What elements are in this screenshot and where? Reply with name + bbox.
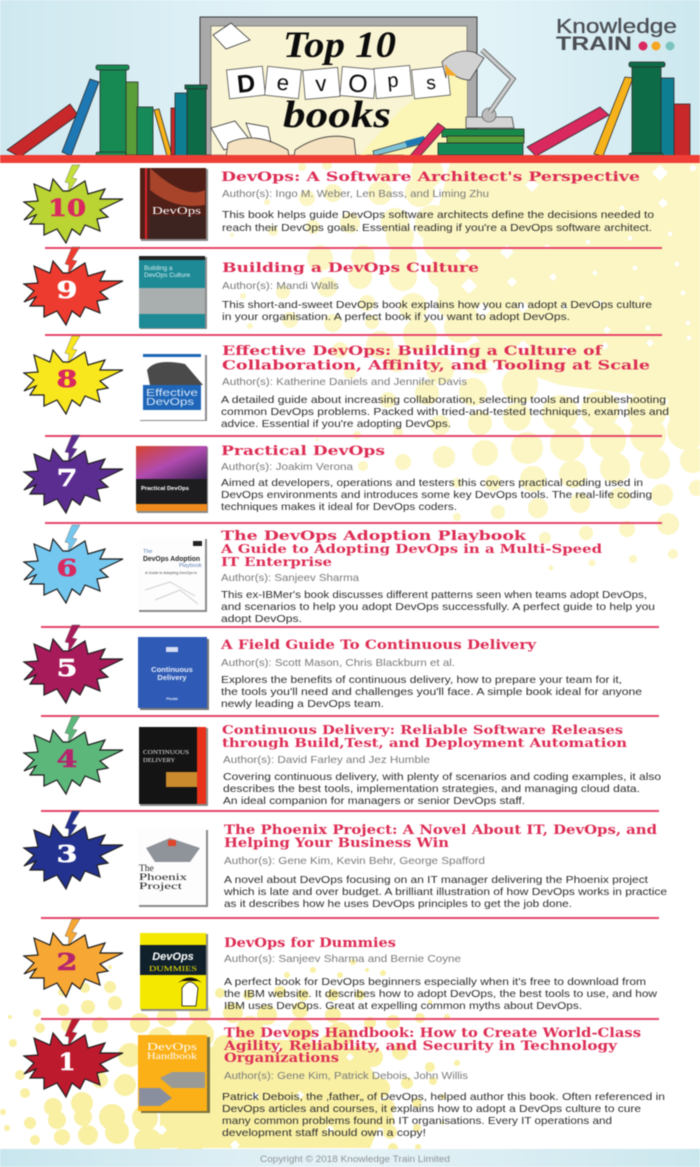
- heading: DevOps letter tiles: e: [276, 69, 290, 96]
- title: [222, 722, 627, 750]
- logo: Knowledge Train: TRAIN: [556, 34, 632, 55]
- sticky notes: [211, 23, 271, 150]
- book cover: [140, 933, 208, 1011]
- badge: number 4: 4: [56, 746, 78, 773]
- badge: number 5: [24, 625, 123, 703]
- desk lamp: [442, 50, 514, 128]
- heading: DevOps letter tiles: D: [236, 69, 257, 99]
- authors: Author(s): Gene Kim, Kevin Behr, George Spafford: [224, 855, 485, 867]
- description: DevOps environments and introduces some key DevOps tools. The real-life coding: [221, 489, 652, 501]
- book cover: The: [143, 549, 152, 555]
- book cover: [138, 538, 207, 612]
- description: A perfect book for DevOps beginners especially when it's free to download from: [224, 976, 646, 988]
- badge: number 8: [24, 336, 123, 414]
- shelf: [0, 155, 700, 163]
- description: [221, 394, 669, 430]
- description: Explores the benefits of continuous delivery, how to prepare your team for it,: [221, 674, 622, 686]
- book cover: Phoenix: [139, 873, 187, 883]
- panel: book 10: [24, 165, 654, 243]
- description: [223, 771, 661, 807]
- authors: Author(s): Scott Mason, Chris Blackburn et al.: [221, 657, 455, 669]
- description: describes the best tools, implementation strategies, and managing cloud data.: [223, 783, 640, 795]
- book cover: Practical DevOps: [141, 486, 189, 492]
- authors: Author(s): Ingo M. Weber, Len Bass, and Liming Zhu: [222, 188, 489, 200]
- book cover: CONTINUOUS: [143, 749, 189, 756]
- description: common DevOps problems. Packed with tried-and-tested techniques, examples and: [221, 406, 669, 418]
- title: IT Enterprise: [221, 554, 332, 569]
- book cover: Playbook: [179, 563, 202, 569]
- title: Building a DevOps Culture: [222, 261, 479, 276]
- description: advice. Essential if you're adopting DevOps.: [221, 418, 451, 430]
- description: IBM uses DevOps. Great at expelling common myths about DevOps.: [224, 1000, 582, 1012]
- badge: number 10: [24, 165, 123, 243]
- description: the tools you'll need and challenges you'll face. A simple book ideal for anyone: [221, 686, 642, 698]
- book cover: [138, 1035, 210, 1113]
- heading: DevOps letter tiles: [227, 65, 450, 100]
- book cover: [139, 256, 207, 329]
- badge: number 3: [24, 811, 123, 889]
- book cover: DevOps: [152, 951, 194, 963]
- description: [223, 874, 667, 910]
- description: and scenarios to help you adopt DevOps successfully. A perfect guide to help you: [221, 601, 655, 613]
- book cover: DELIVERY: [143, 757, 175, 764]
- book cover: Building a: [144, 265, 173, 272]
- book cover: [138, 637, 209, 710]
- description: [222, 1091, 665, 1139]
- panel: book 7: [24, 435, 652, 513]
- badge: number 9: 9: [56, 277, 78, 304]
- book cover: DevOps Adoption: [143, 556, 200, 563]
- open book: [225, 136, 356, 160]
- badge: number 5: 5: [56, 655, 78, 682]
- title: A Field Guide To Continuous Delivery: [220, 638, 537, 653]
- description: An ideal companion for managers or senior DevOps staff.: [223, 795, 525, 807]
- book cover: [138, 829, 208, 907]
- title: The DevOps Adoption Playbook: [221, 529, 527, 544]
- authors: Author(s): David Farley and Jez Humble: [223, 754, 430, 766]
- description: which is late and over budget. A brilliant illustration of how DevOps works in practice: [223, 886, 667, 898]
- badge: number 7: [24, 435, 123, 513]
- badge: number 8: 8: [56, 366, 78, 393]
- badge: number 1: [24, 1019, 123, 1097]
- badge: number 6: [24, 525, 123, 603]
- right book stack: [527, 62, 690, 157]
- title: [222, 344, 650, 374]
- title: [223, 1026, 641, 1066]
- badge: number 7: 7: [56, 465, 78, 492]
- panel: book 5: [24, 625, 642, 710]
- book cover: DUMMIES: [149, 964, 197, 973]
- title: [220, 529, 602, 569]
- description: in your organisation. A perfect book if you want to adopt DevOps.: [222, 311, 570, 323]
- authors: Author(s): Mandi Walls: [222, 280, 339, 292]
- book cover: [139, 727, 208, 806]
- centre book stack: [438, 129, 524, 155]
- description: as it describes how he uses DevOps principles to get the job done.: [224, 898, 572, 910]
- description: A detailed guide about increasing collaboration, selecting tools and troubleshooting: [221, 394, 666, 406]
- authors: Author(s): Sanjeev Sharma: [221, 572, 359, 584]
- book cover: DevOps Culture: [144, 272, 191, 279]
- description: [221, 477, 652, 513]
- logo: Knowledge Train: [556, 16, 677, 55]
- title: Practical DevOps: [221, 444, 385, 459]
- title: Agility, Reliability, and Security in Technology: [223, 1039, 618, 1054]
- description: development staff should own a copy!: [222, 1127, 426, 1139]
- title: through Build,Test, and Deployment Automation: [222, 735, 627, 750]
- badge: number 6: 6: [56, 555, 78, 582]
- panel: book 1: [24, 1019, 665, 1139]
- panel: book 2: [24, 919, 657, 1012]
- book cover: [140, 168, 208, 241]
- book cover: Handbook: [147, 1051, 198, 1061]
- description: many common problems found in IT organisations. Every IT operations and: [222, 1115, 612, 1127]
- description: A novel about DevOps focusing on an IT manager delivering the Phoenix project: [224, 874, 648, 886]
- title: DevOps: A Software Architect's Perspective: [221, 170, 640, 185]
- description: the IBM website. It describes how to adopt DevOps, the best tools to use, and how: [224, 988, 657, 1000]
- badge: number 1: 1: [58, 1049, 76, 1076]
- title: The Devops Handbook: How to Create World-Class: [224, 1026, 641, 1041]
- footer band: [0, 1149, 700, 1167]
- book cover: Effective: [146, 388, 199, 399]
- panel: book 8: [24, 336, 669, 430]
- book cover: A Guide to Adopting DevOps in: [145, 571, 197, 575]
- board frame: [200, 17, 477, 155]
- description: DevOps articles and courses, it explains how to adopt a DevOps culture to cure: [222, 1103, 641, 1115]
- title: Collaboration, Affinity, and Tooling at Scale: [222, 358, 650, 374]
- heading: Top 10: Top 10: [283, 25, 396, 66]
- badge: number 3: 3: [56, 841, 78, 868]
- title: Effective DevOps: Building a Culture of: [222, 344, 604, 359]
- heading: DevOps letter tiles: p: [386, 70, 399, 92]
- book cover: DevOps: [152, 205, 201, 217]
- book cover: [136, 446, 208, 513]
- title: A Guide to Adopting DevOps in a Multi-Speed: [220, 541, 602, 556]
- description: Covering continuous delivery, with plenty of scenarios and coding examples, it also: [223, 771, 661, 783]
- description: [221, 589, 655, 625]
- background halftone: bottom white diamonds: [110, 1044, 354, 1150]
- panel: book 6: [24, 525, 655, 625]
- description: [222, 299, 652, 323]
- badge: number 2: 2: [56, 949, 78, 976]
- title: Continuous Delivery: Reliable Software Releases: [222, 722, 623, 737]
- title: The Phoenix Project: A Novel About IT, DevOps, and: [224, 823, 657, 838]
- book cover: Delivery: [157, 673, 187, 682]
- title: [224, 823, 657, 851]
- description: This book helps guide DevOps software architects define the decisions needed to: [222, 209, 654, 221]
- title: Organizations: [224, 1051, 339, 1066]
- book cover: Pivotal: [166, 697, 178, 701]
- description: Aimed at developers, operations and testers this covers practical coding used in: [221, 477, 643, 489]
- description: reach their DevOps goals. Essential reading if you're a DevOps software architect.: [222, 222, 652, 234]
- left book stack: [7, 65, 207, 158]
- panel: book 3: [24, 811, 667, 910]
- description: [224, 976, 657, 1012]
- authors: Author(s): Sanjeev Sharma and Bernie Coyne: [224, 953, 461, 965]
- background halftone: top right: [230, 156, 700, 570]
- heading: DevOps letter tiles: O: [347, 69, 369, 99]
- book cover: Continuous: [151, 665, 193, 674]
- pens and small book: [365, 123, 445, 163]
- sky background: [0, 0, 700, 156]
- description: [221, 674, 642, 710]
- background halftone: white diamonds: [455, 164, 697, 370]
- description: [222, 209, 654, 234]
- title: DevOps for Dummies: [224, 936, 396, 951]
- description: This ex-IBMer's book discusses different patterns seen when teams adopt DevOps,: [221, 589, 647, 601]
- title: Helping Your Business Win: [224, 836, 450, 851]
- heading: DevOps letter tiles: v: [314, 71, 328, 96]
- background halftone: bottom left: [0, 959, 460, 1156]
- description: techniques makes it ideal for DevOps coders.: [221, 501, 457, 513]
- logo: Knowledge Train: Knowledge: [556, 16, 677, 38]
- book cover: DevOps: [146, 397, 194, 408]
- badge: number 10: 10: [48, 195, 86, 222]
- panel: book 4: [24, 716, 661, 807]
- description: Patrick Debois, the ‚father„ of DevOps, helped author this book. Often referenced in: [222, 1091, 665, 1103]
- panel: book 9: [24, 247, 652, 329]
- heading: books: books: [283, 94, 391, 136]
- book cover: The: [139, 864, 154, 874]
- authors: Author(s): Joakim Verona: [221, 461, 353, 473]
- authors: Author(s): Gene Kim, Patrick Debois, John Willis: [224, 1070, 468, 1082]
- description: This short-and-sweet DevOps book explains how you can adopt a DevOps culture: [222, 299, 652, 311]
- description: adopt DevOps.: [221, 613, 302, 625]
- header illustration: [0, 0, 700, 163]
- book cover: DevOps: [147, 1042, 197, 1053]
- badge: number 4: [24, 716, 123, 794]
- badge: number 9: [24, 247, 123, 325]
- description: newly leading a DevOps team.: [221, 698, 384, 710]
- badge: number 2: [24, 919, 123, 997]
- book cover: Project: [139, 882, 183, 892]
- book cover: [139, 354, 207, 421]
- authors: Author(s): Katherine Daniels and Jennifer Davis: [222, 376, 467, 388]
- copyright: Copyright © 2018 Knowledge Train Limited: [260, 1154, 450, 1165]
- heading: DevOps letter tiles: s: [425, 73, 437, 94]
